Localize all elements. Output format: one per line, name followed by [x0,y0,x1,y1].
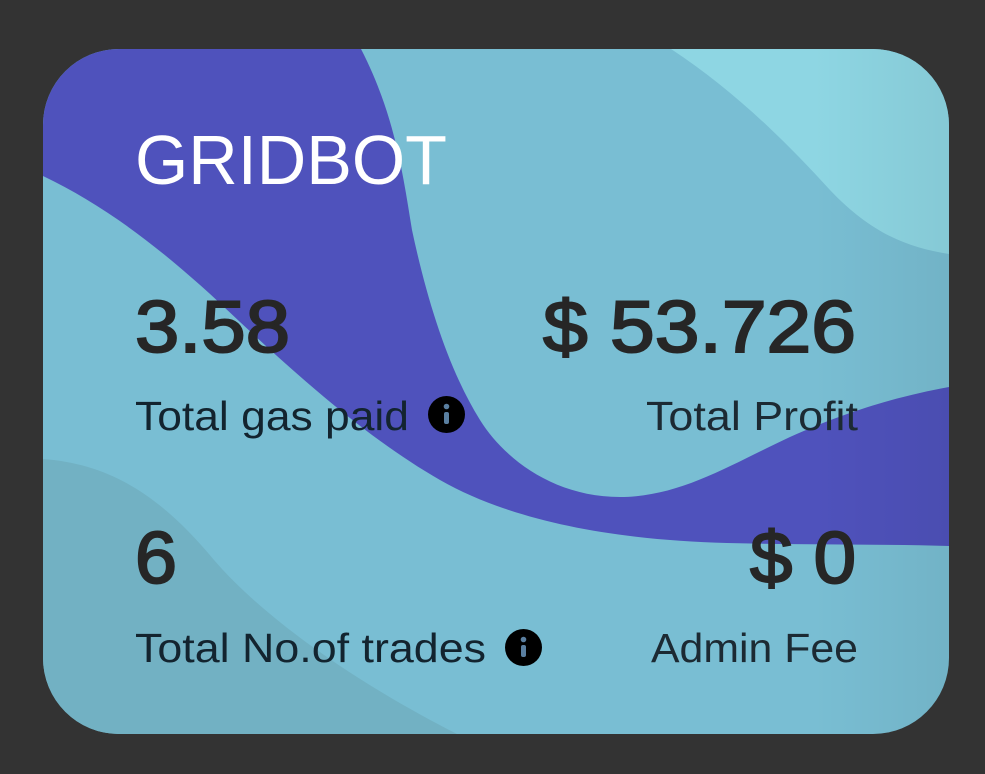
value: profit: $ 53.726 [543,287,856,368]
value: trades: 6 [135,518,177,599]
stat: total profit [543,287,859,439]
edge shading [898,54,949,726]
icon: info [428,396,465,433]
value: admin fee: $ 0 [750,518,856,599]
icon: info [505,629,542,666]
stat: admin fee [651,518,858,671]
label: gas paid: Total gas paid [135,393,409,439]
stat: total gas paid [135,287,465,439]
label: trades: Total No.of trades [135,625,486,671]
value: gas paid: 3.58 [135,287,290,368]
label: admin fee: Admin Fee [651,625,858,671]
title: GRIDBOT [135,121,447,199]
stat: total trades [135,518,542,671]
wave: dark bottom left [43,459,457,734]
wave: light top right [671,49,949,254]
label: profit: Total Profit [646,393,859,439]
wave: purple band [43,49,949,546]
